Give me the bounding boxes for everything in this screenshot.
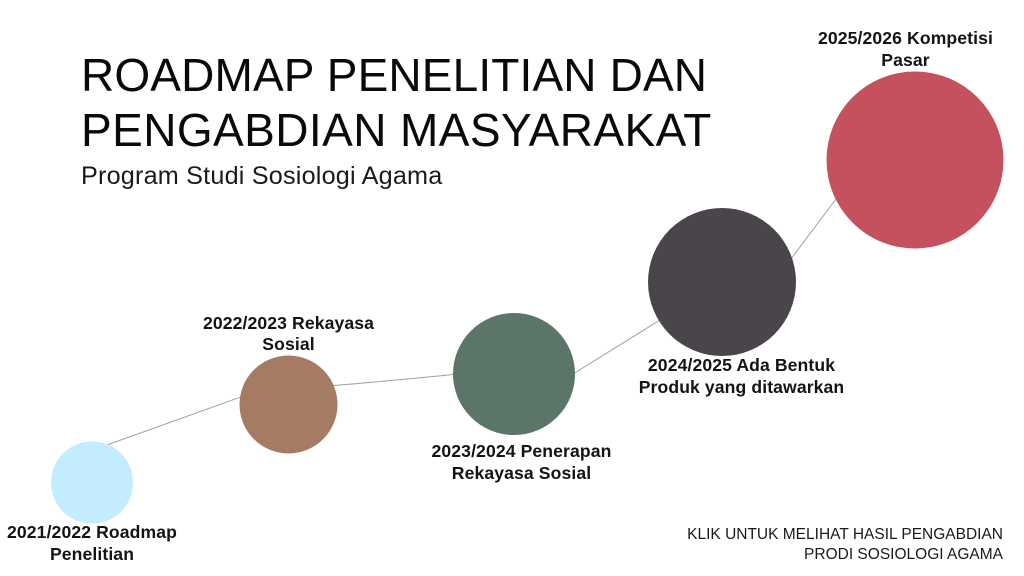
label: 2022/2023: 2022/2023 Rekayasa <box>203 312 374 332</box>
label: 2021/2022 <box>7 522 177 564</box>
label: 2024/2025: 2024/2025 Ada Bentuk <box>648 355 835 375</box>
label: 2024/2025 <box>639 355 844 397</box>
label: 2025/2026: Pasar <box>881 50 930 70</box>
call to action text: PRODI SOSIOLOGI AGAMA <box>804 546 1003 563</box>
label: 2021/2022: 2021/2022 Roadmap <box>7 522 177 542</box>
label: 2023/2024: 2023/2024 Penerapan <box>432 441 611 461</box>
title: ROADMAP PENELITIAN DAN <box>81 49 707 101</box>
label: 2022/2023 <box>203 312 374 354</box>
title: PENGABDIAN MASYARAKAT <box>81 104 712 156</box>
label: 2022/2023: Sosial <box>262 334 315 354</box>
call to action text: KLIK UNTUK MELIHAT HASIL PENGABDIAN <box>687 526 1003 543</box>
label: 2025/2026: 2025/2026 Kompetisi <box>818 28 993 48</box>
title <box>81 49 712 156</box>
label: 2024/2025: Produk yang ditawarkan <box>639 377 844 397</box>
label: 2023/2024 <box>432 441 611 483</box>
label: 2023/2024: Rekayasa Sosial <box>452 463 591 483</box>
call to action text <box>687 526 1003 563</box>
label: 2025/2026 <box>818 28 993 70</box>
subtitle: Program Studi Sosiologi Agama <box>81 162 442 190</box>
label: 2021/2022: Penelitian <box>50 544 134 564</box>
